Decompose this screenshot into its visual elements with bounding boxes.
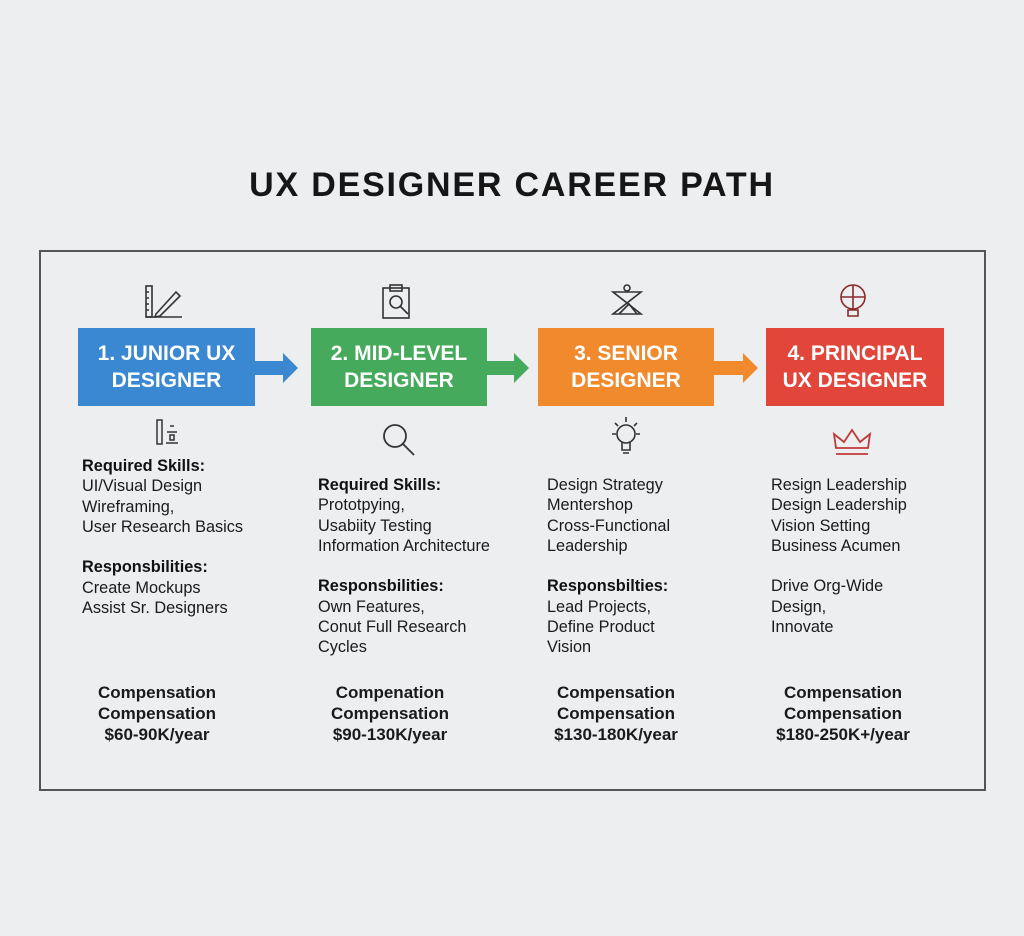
column 3 text: Vision xyxy=(547,638,591,656)
box: senior: DESIGNER xyxy=(571,369,681,392)
compensation 3: Compensation xyxy=(557,704,675,723)
column 1 text: Wireframing, xyxy=(82,498,174,516)
compensation 3 xyxy=(554,683,678,744)
column 3 text: Responsbilties: xyxy=(547,577,668,595)
compensation 3: Compensation xyxy=(557,683,675,702)
box: mid-level: DESIGNER xyxy=(344,369,454,392)
column 3 text xyxy=(547,476,670,656)
icon: crown xyxy=(832,428,872,455)
column 2 text: Own Features, xyxy=(318,598,425,616)
column 3 text: Design Strategy xyxy=(547,476,663,494)
box: mid-level xyxy=(311,328,487,406)
column 1 text: User Research Basics xyxy=(82,518,243,536)
column 1 text: Create Mockups xyxy=(82,579,201,597)
column 4 text: Vision Setting xyxy=(771,517,870,535)
icon: lightbulb xyxy=(612,417,640,454)
column 2 text: Responsbilities: xyxy=(318,577,444,595)
icon: senior symbol xyxy=(611,284,643,315)
column 3 text: Define Product xyxy=(547,618,655,636)
icon: brain bulb xyxy=(840,284,866,317)
compensation 2 xyxy=(331,683,449,744)
compensation 2: Compensation xyxy=(331,704,449,723)
icon: ruler small xyxy=(156,419,178,445)
compensation 1 xyxy=(98,683,216,744)
box: senior: 3. SENIOR xyxy=(574,342,678,365)
column 1 text: UI/Visual Design xyxy=(82,477,202,495)
icon: clipboard search xyxy=(382,284,410,319)
arrow 1 xyxy=(255,353,298,383)
compensation 1: $60-90K/year xyxy=(105,725,209,744)
column 3 text: Leadership xyxy=(547,537,628,555)
compensation 1: Compensation xyxy=(98,683,216,702)
compensation 2: Compenation xyxy=(336,683,444,702)
box: junior: 1. JUNIOR UX xyxy=(98,342,235,365)
column 3 text: Cross-Functional xyxy=(547,517,670,535)
compensation 3: $130-180K/year xyxy=(554,725,678,744)
column 4 text: Resign Leadership xyxy=(771,476,907,494)
column 1 text: Assist Sr. Designers xyxy=(82,599,228,617)
box: senior xyxy=(538,328,714,406)
box: principal xyxy=(766,328,944,406)
compensation 4: Compensation xyxy=(784,704,902,723)
column 4 text xyxy=(771,476,907,636)
compensation 4 xyxy=(776,683,910,744)
column 2 text: Information Architecture xyxy=(318,537,490,555)
column 2 text: Required Skills: xyxy=(318,476,441,494)
column 1 text xyxy=(82,457,243,617)
compensation 4: $180-250K+/year xyxy=(776,725,910,744)
column 4 text: Innovate xyxy=(771,618,833,636)
box: junior xyxy=(78,328,255,406)
box: principal: UX DESIGNER xyxy=(783,369,927,392)
column 4 text: Design Leadership xyxy=(771,496,907,514)
icon: magnifier xyxy=(383,424,415,456)
box: mid-level: 2. MID-LEVEL xyxy=(331,342,467,365)
box: principal: 4. PRINCIPAL xyxy=(788,342,922,365)
arrow 3 xyxy=(714,353,758,383)
column 2 text: Prototpying, xyxy=(318,496,405,514)
column 3 text: Mentershop xyxy=(547,496,633,514)
column 2 text xyxy=(318,476,490,656)
panel: career path frame xyxy=(39,250,986,791)
column 4 text: Drive Org-Wide xyxy=(771,577,883,595)
column 2 text: Cycles xyxy=(318,638,367,656)
title: UX DESIGNER CAREER PATH xyxy=(249,166,775,204)
compensation 2: $90-130K/year xyxy=(333,725,447,744)
arrow 2 xyxy=(487,353,529,383)
column 2 text: Conut Full Research xyxy=(318,618,466,636)
column 1 text: Responsbilities: xyxy=(82,558,208,576)
compensation 1: Compensation xyxy=(98,704,216,723)
column 4 text: Design, xyxy=(771,598,826,616)
compensation 4: Compensation xyxy=(784,683,902,702)
icon: ruler and pencil xyxy=(145,285,182,318)
column 1 text: Required Skills: xyxy=(82,457,205,475)
column 2 text: Usabiity Testing xyxy=(318,517,432,535)
box: junior: DESIGNER xyxy=(112,369,221,392)
column 3 text: Lead Projects, xyxy=(547,598,651,616)
column 4 text: Business Acumen xyxy=(771,537,900,555)
